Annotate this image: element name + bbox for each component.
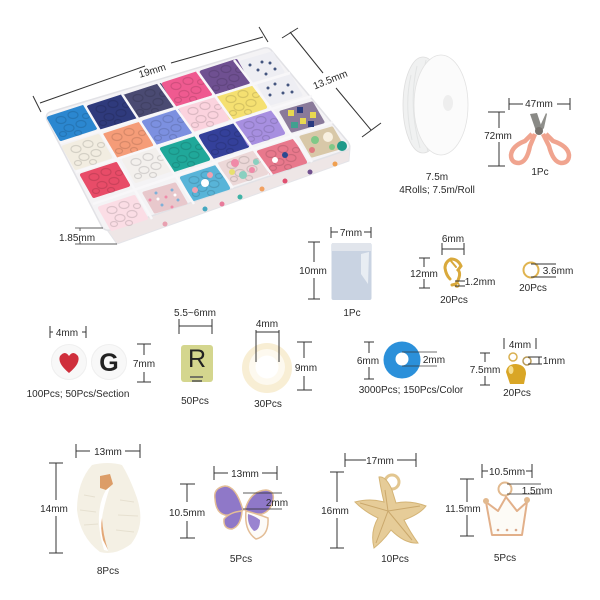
label: spacer quantity: 30Pcs — [254, 399, 282, 410]
dimension: clasp 6mm: 6mm — [442, 234, 464, 245]
dimension: cube 5.5~6mm — [174, 308, 216, 334]
dimension: tip 4mm: 4mm — [509, 340, 531, 351]
dimension: butterfly 10.5mm — [169, 484, 205, 538]
dimension: tray width 13.5mm: 13.5mm — [312, 69, 349, 92]
dimension: disc 6mm: 6mm — [357, 356, 379, 367]
label: spool — [399, 172, 475, 196]
tray lid outline — [46, 48, 350, 230]
dimension: crown 1.5mm — [507, 484, 552, 497]
dimension: starfish 17mm — [345, 453, 416, 467]
label: crown quantity: 5Pcs — [494, 553, 516, 564]
dimension: shell 14mm: 14mm — [40, 504, 68, 515]
dimension: tip 7.5mm — [470, 353, 500, 385]
label: tip quantity: 20Pcs — [503, 388, 531, 399]
dimension: shell 14mm — [40, 463, 68, 553]
dimension: tip 7.5mm: 7.5mm — [470, 365, 500, 376]
photo: bead storage tray — [46, 48, 350, 244]
label: bead quantity: 100Pcs; 50Pcs/Section — [27, 389, 129, 400]
photo: letter cube bead — [181, 345, 213, 382]
bead compartments — [49, 53, 343, 229]
dimension: tray height 1.85mm — [59, 228, 117, 244]
label: starfish quantity: 10Pcs — [381, 554, 409, 565]
photo: zip bag — [332, 243, 372, 300]
photo: jump ring — [524, 262, 538, 278]
dimension: clasp 12mm — [410, 258, 438, 288]
photo: blue polymer clay disc — [384, 342, 420, 378]
label: clasp quantity: 20Pcs — [440, 295, 468, 306]
dimension: tray height 1.85mm: 1.85mm — [59, 233, 95, 244]
dimension: cube 5.5~6mm: 5.5~6mm — [174, 308, 216, 319]
dimension: scissors 47mm — [509, 98, 570, 110]
dimension: shell 13mm — [76, 444, 140, 458]
photo: scissors — [511, 113, 569, 163]
dimension: tray length 19mm: 19mm — [138, 62, 167, 81]
label: scissors quantity: 1Pc — [531, 167, 549, 178]
label: disc quantity: 3000Pcs; 150Pcs/Color — [359, 385, 464, 396]
dimension: tip 1mm: 1mm — [543, 356, 565, 367]
dimension: spacer 4mm — [256, 319, 279, 362]
photo: cowrie shell — [77, 463, 140, 553]
dimension: butterfly 2mm — [243, 493, 288, 509]
dimension: jump ring 3.6mm — [531, 264, 573, 277]
dimension: spacer 9mm — [295, 342, 317, 390]
dimension: tip 1mm — [528, 356, 565, 367]
photo: alphabet and heart beads — [52, 344, 126, 380]
dimension: scissors 72mm: 72mm — [484, 131, 512, 142]
dimension: butterfly 10.5mm: 10.5mm — [169, 508, 205, 519]
dimension: bag 7mm: 7mm — [340, 228, 362, 239]
label: spool: 4Rolls; 7.5m/Roll — [399, 185, 475, 196]
photo: gold bead tip — [506, 353, 531, 384]
photo: starfish charm — [355, 475, 426, 548]
tray front side — [105, 148, 350, 244]
dimension: clasp 1.2mm: 1.2mm — [465, 277, 495, 288]
dimension: crown 10.5mm — [482, 464, 532, 478]
photo: lobster clasp — [445, 259, 461, 287]
photo: butterfly charm — [215, 486, 273, 539]
dimension: scissors 47mm: 47mm — [525, 99, 553, 110]
dimension: spacer 4mm: 4mm — [256, 319, 278, 330]
label: cube quantity: 50Pcs — [181, 396, 209, 407]
dimension: crown 11.5mm: 11.5mm — [445, 504, 481, 515]
dimension: bead 4mm — [50, 326, 86, 339]
dimension: starfish 16mm: 16mm — [321, 506, 349, 517]
dimension: disc 6mm — [357, 342, 379, 379]
dimension: tray length 19mm — [33, 27, 268, 112]
dimension: starfish 17mm: 17mm — [366, 456, 394, 467]
dimension: crown 10.5mm: 10.5mm — [489, 467, 525, 478]
dimension: bag 10mm — [299, 242, 327, 299]
photo: elastic thread spool — [403, 55, 468, 155]
dimension: disc 2mm: 2mm — [423, 355, 445, 366]
bead details — [148, 60, 347, 208]
photo: crown charm — [483, 482, 530, 535]
dimension: clasp 6mm — [442, 234, 464, 255]
dimension: butterfly 13mm: 13mm — [231, 469, 259, 480]
dimension: bead 7mm — [133, 344, 155, 382]
dimension: crown 1.5mm: 1.5mm — [522, 486, 552, 497]
dimension: bag 10mm: 10mm — [299, 266, 327, 277]
photo: letter cube bead: R — [188, 345, 206, 373]
dimension: tip 4mm — [504, 338, 536, 351]
dimension: clasp 12mm: 12mm — [410, 269, 438, 280]
dimension: butterfly 13mm — [214, 466, 277, 480]
dimension: bead 7mm: 7mm — [133, 359, 155, 370]
label: shell quantity: 8Pcs — [97, 566, 119, 577]
dimension: scissors 72mm — [484, 112, 512, 166]
label: spool: 7.5m — [426, 172, 448, 183]
dimension: crown 11.5mm — [445, 479, 481, 536]
dimension: tray width 13.5mm — [282, 28, 381, 137]
dimension: bag 7mm — [331, 227, 371, 239]
dimension: disc 2mm — [402, 352, 445, 366]
dimension: starfish 16mm — [321, 472, 349, 548]
dimension: butterfly 2mm: 2mm — [266, 498, 288, 509]
label: butterfly quantity: 5Pcs — [230, 554, 252, 565]
photo: alphabet and heart beads: G — [99, 349, 119, 377]
compartment dividers — [60, 60, 333, 219]
dimension: spacer 9mm: 9mm — [295, 363, 317, 374]
label: bag quantity: 1Pc — [343, 308, 361, 319]
dimension: shell 13mm: 13mm — [94, 447, 122, 458]
photo: clear spacer ring — [242, 343, 292, 393]
dimension: jump ring 3.6mm: 3.6mm — [543, 266, 573, 277]
dimension: bead 4mm: 4mm — [56, 328, 78, 339]
label: jump ring quantity: 20Pcs — [519, 283, 547, 294]
